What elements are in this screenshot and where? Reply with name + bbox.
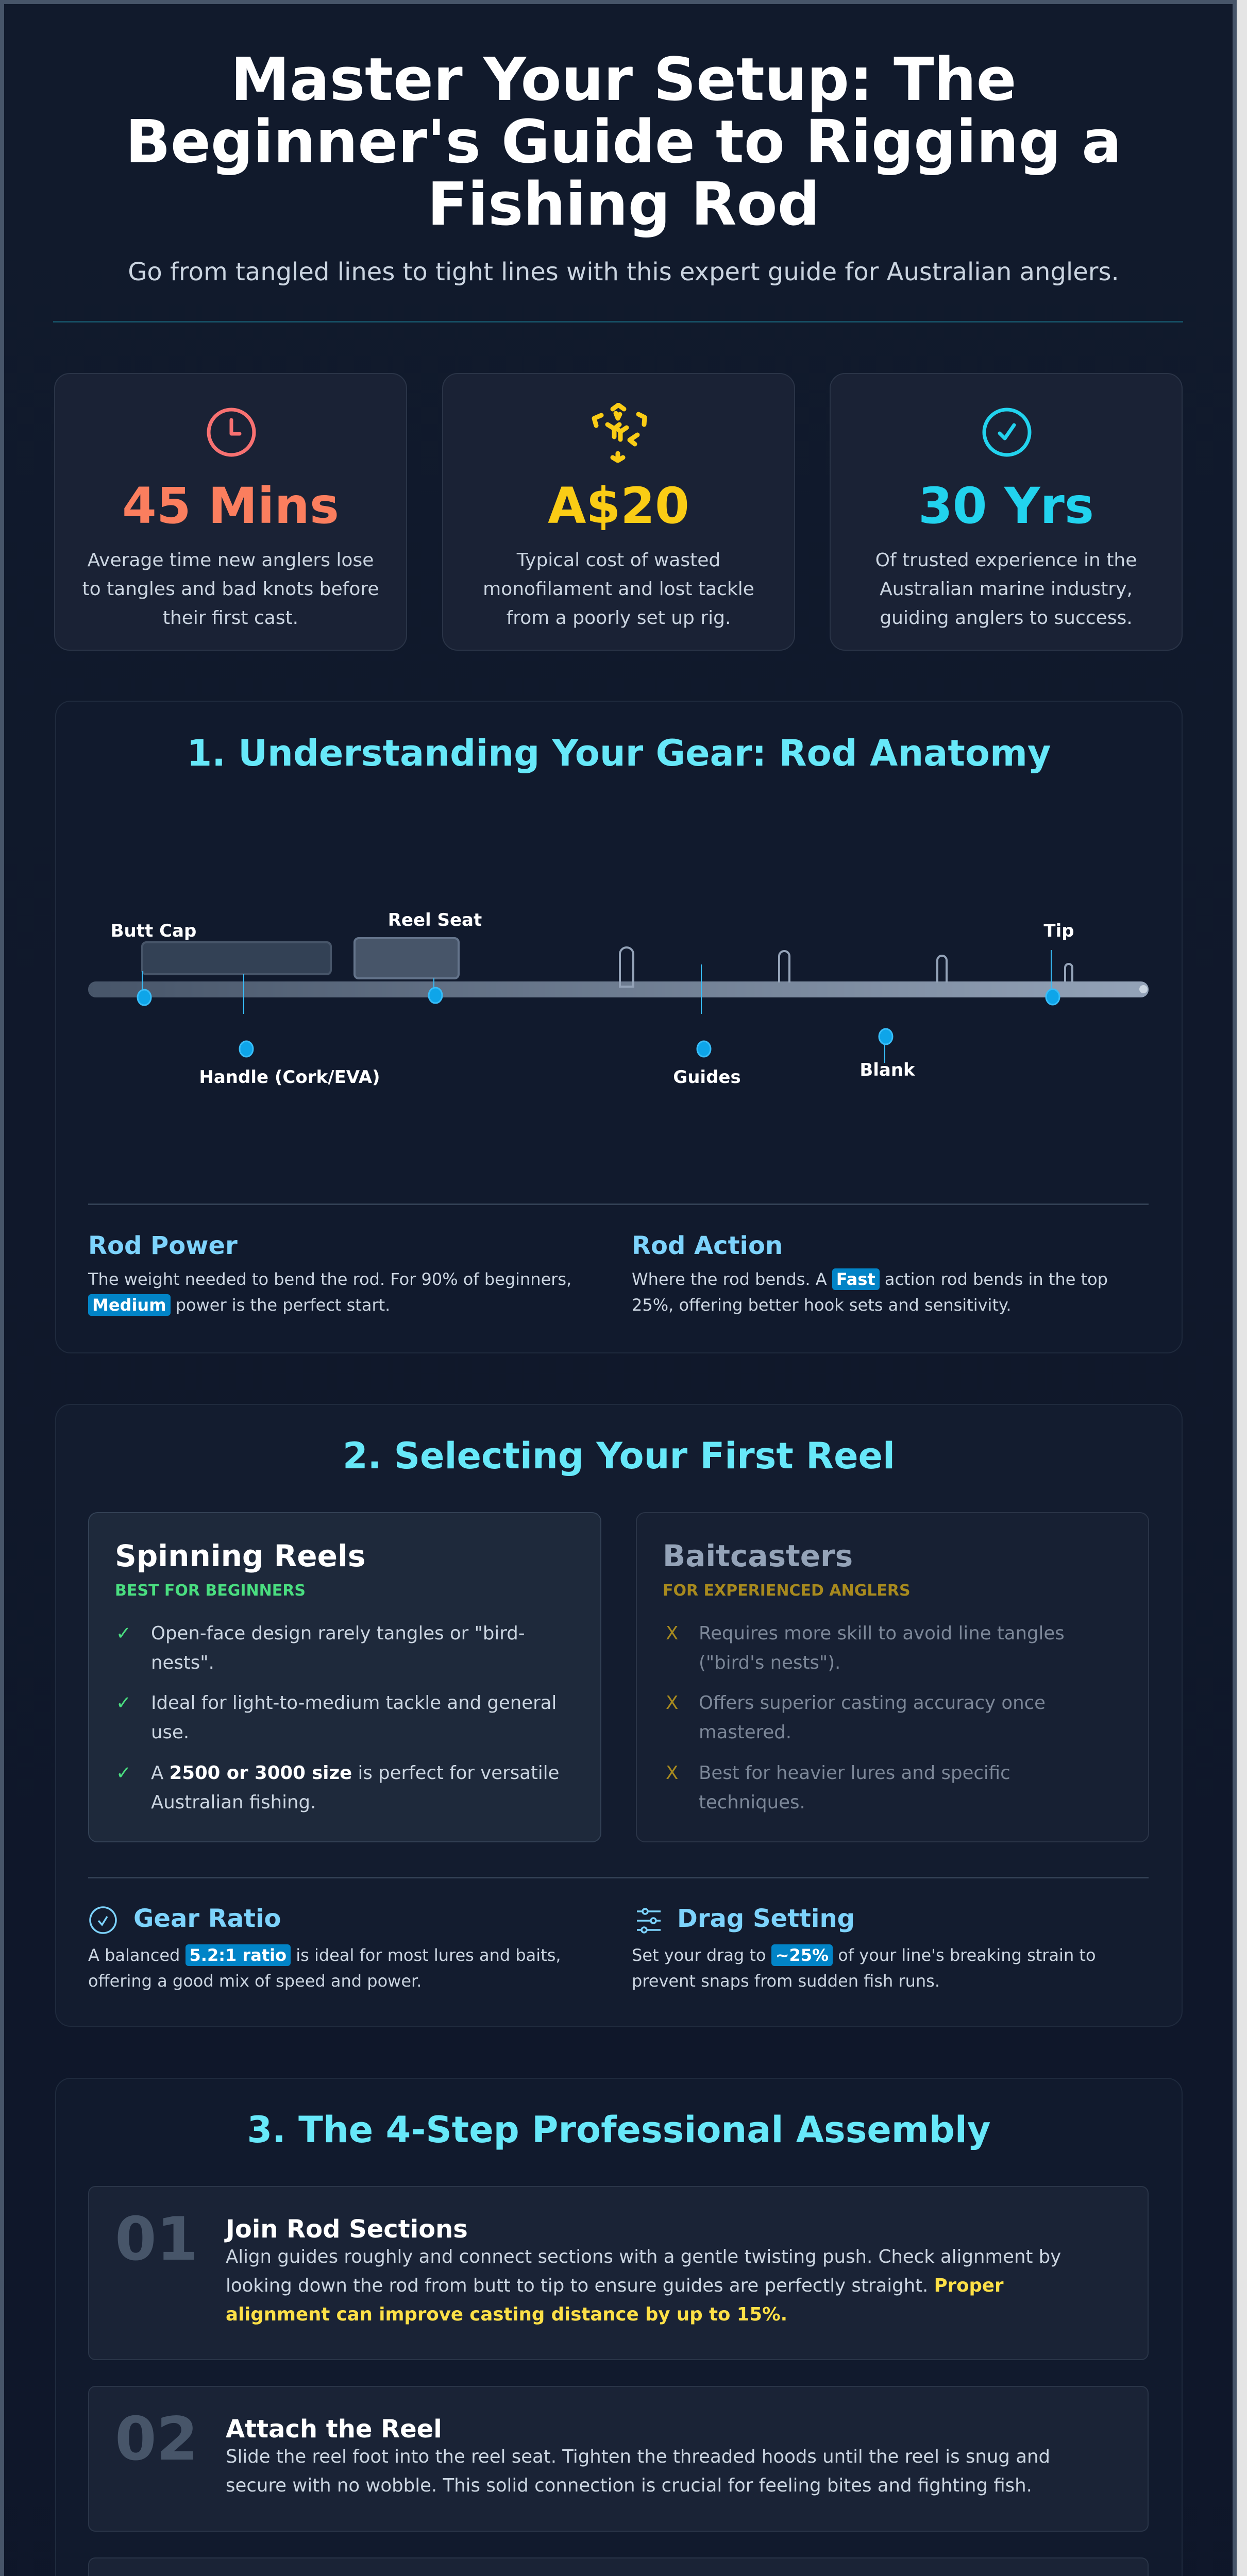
cons list: X	[666, 1623, 678, 1644]
step 03	[88, 2557, 1149, 2576]
card tag: BEST FOR BEGINNERS	[115, 1582, 306, 1600]
pros list: Open-face design rarely tangles or "bird-	[151, 1623, 525, 1644]
text block: rod action	[632, 1231, 1108, 1315]
chart: rod diagram	[88, 910, 1149, 1088]
step 02: secure with no wobble. This solid connection is crucial for feeling bites and fighting fish.	[226, 2475, 1032, 2496]
stat description: from a poorly set up rig.	[507, 607, 731, 629]
cons list: Offers superior casting accuracy once	[699, 1692, 1046, 1714]
pros list	[116, 1623, 559, 1813]
text block: rod action: 25%, offering better hook sets and sensitivity.	[632, 1295, 1012, 1315]
stat description	[82, 550, 379, 629]
pros list: Ideal for light-to-medium tackle and general	[151, 1692, 557, 1714]
step 02: Attach the Reel	[226, 2415, 442, 2444]
text block: rod power: Rod Power	[88, 1231, 238, 1260]
chart: rod diagram: Reel Seat	[388, 910, 482, 930]
heading: section 2: 2. Selecting Your First Reel	[343, 1435, 895, 1477]
stat card: 30 yrs	[830, 373, 1183, 651]
panel: assembly	[55, 2078, 1183, 2576]
stat description	[875, 550, 1137, 629]
step 01: Join Rod Sections	[226, 2215, 468, 2244]
stat number: 45 Mins	[122, 477, 339, 535]
step 02: Slide the reel foot into the reel seat. Tighten the threaded hoods until the reel is snug and	[226, 2446, 1050, 2467]
stat card: A$20	[442, 373, 795, 651]
stat description: guiding anglers to success.	[880, 607, 1133, 629]
card title: Baitcasters	[663, 1538, 853, 1573]
card tag: FOR EXPERIENCED ANGLERS	[663, 1582, 911, 1600]
icon: sliders	[637, 1908, 661, 1934]
text block: gear ratio: Gear Ratio	[133, 1904, 281, 1933]
icon: gear check	[89, 1906, 117, 1934]
panel: rod anatomy	[55, 701, 1183, 1353]
step 01: Align guides roughly and connect sections with a gentle twisting push. Check alignment by	[226, 2246, 1061, 2267]
title: Fishing Rod	[427, 170, 820, 239]
text block: drag setting	[632, 1904, 1096, 1991]
card title: Spinning Reels	[115, 1538, 365, 1573]
pros list: ✓	[116, 1623, 131, 1644]
cons list: X	[666, 1692, 678, 1714]
stat number: 30 Yrs	[918, 477, 1094, 535]
cons list: X	[666, 1762, 678, 1784]
chart: rod diagram: Blank	[860, 1060, 916, 1080]
cons list: Best for heavier lures and specific	[699, 1762, 1010, 1784]
icon: clock	[207, 408, 256, 456]
card: baitcasters	[636, 1512, 1149, 1842]
heading: section 1: 1. Understanding Your Gear: Rod Anatomy	[187, 732, 1051, 774]
text block: gear ratio: A balanced 5.2:1 ratio is ideal for most lures and baits,	[88, 1945, 561, 1965]
text block: rod action: Rod Action	[632, 1231, 783, 1260]
title: Beginner's Guide to Rigging a	[125, 108, 1122, 177]
title	[125, 45, 1122, 239]
pros list: use.	[151, 1722, 189, 1743]
step 02: 02	[115, 2404, 198, 2474]
pros list: nests".	[151, 1652, 214, 1673]
cons list: Requires more skill to avoid line tangles	[699, 1623, 1065, 1644]
cons list: techniques.	[699, 1792, 805, 1813]
stat description: Of trusted experience in the	[875, 550, 1137, 571]
text block: gear ratio: offering a good mix of speed and power.	[88, 1971, 422, 1991]
icon: check circle	[982, 408, 1032, 456]
pros list: ✓	[116, 1692, 131, 1714]
text block: drag setting: prevent snaps from sudden fish runs.	[632, 1971, 940, 1991]
text block: drag setting: Set your drag to ~25% of your line's breaking strain to	[632, 1945, 1096, 1965]
stat number: A$20	[548, 477, 689, 535]
subtitle: Go from tangled lines to tight lines with this expert guide for Australian anglers.	[128, 258, 1119, 286]
pros list: A 2500 or 3000 size is perfect for versatile	[151, 1762, 559, 1784]
stat description: monofilament and lost tackle	[483, 579, 754, 600]
text block: rod power: Medium power is the perfect start.	[92, 1295, 390, 1315]
chart: rod diagram: Handle (Cork/EVA)	[199, 1067, 380, 1088]
step 01: 01	[115, 2205, 198, 2274]
panel: reels	[55, 1404, 1183, 2027]
chart: rod diagram: Butt Cap	[111, 921, 196, 941]
stat card: 45 mins	[54, 373, 407, 651]
text block: rod power: The weight needed to bend the rod. For 90% of beginners,	[88, 1269, 571, 1289]
title: Master Your Setup: The	[231, 45, 1016, 114]
pros list: Australian fishing.	[151, 1792, 316, 1813]
text block: rod action: Where the rod bends. A Fast action rod bends in the top	[632, 1269, 1108, 1289]
text block: rod power	[88, 1231, 571, 1316]
step 02	[88, 2386, 1149, 2532]
stat description: Average time new anglers lose	[88, 550, 374, 571]
stat description: Australian marine industry,	[880, 579, 1133, 600]
step 01	[88, 2186, 1149, 2360]
chart: rod diagram: Tip	[1043, 921, 1074, 941]
cons list	[666, 1623, 1065, 1813]
stat description: Typical cost of wasted	[517, 550, 720, 571]
pros list: ✓	[116, 1762, 131, 1784]
cons list: mastered.	[699, 1722, 791, 1743]
step 01: looking down the rod from butt to tip to ensure guides are perfectly straight. Proper	[226, 2275, 1004, 2296]
card: spinning reels	[88, 1512, 601, 1842]
stat description: their first cast.	[163, 607, 298, 629]
stat description: to tangles and bad knots before	[82, 579, 379, 600]
chart: rod diagram: Guides	[673, 1067, 741, 1088]
text block: gear ratio	[88, 1904, 561, 1991]
step 01: alignment can improve casting distance by up to 15%.	[226, 2304, 787, 2325]
stat description	[483, 550, 754, 629]
cons list: ("bird's nests").	[699, 1652, 840, 1673]
text block: drag setting: Drag Setting	[677, 1904, 855, 1933]
heading: section 3: 3. The 4-Step Professional Assembly	[247, 2109, 991, 2151]
icon: scattered arrows	[592, 403, 647, 463]
